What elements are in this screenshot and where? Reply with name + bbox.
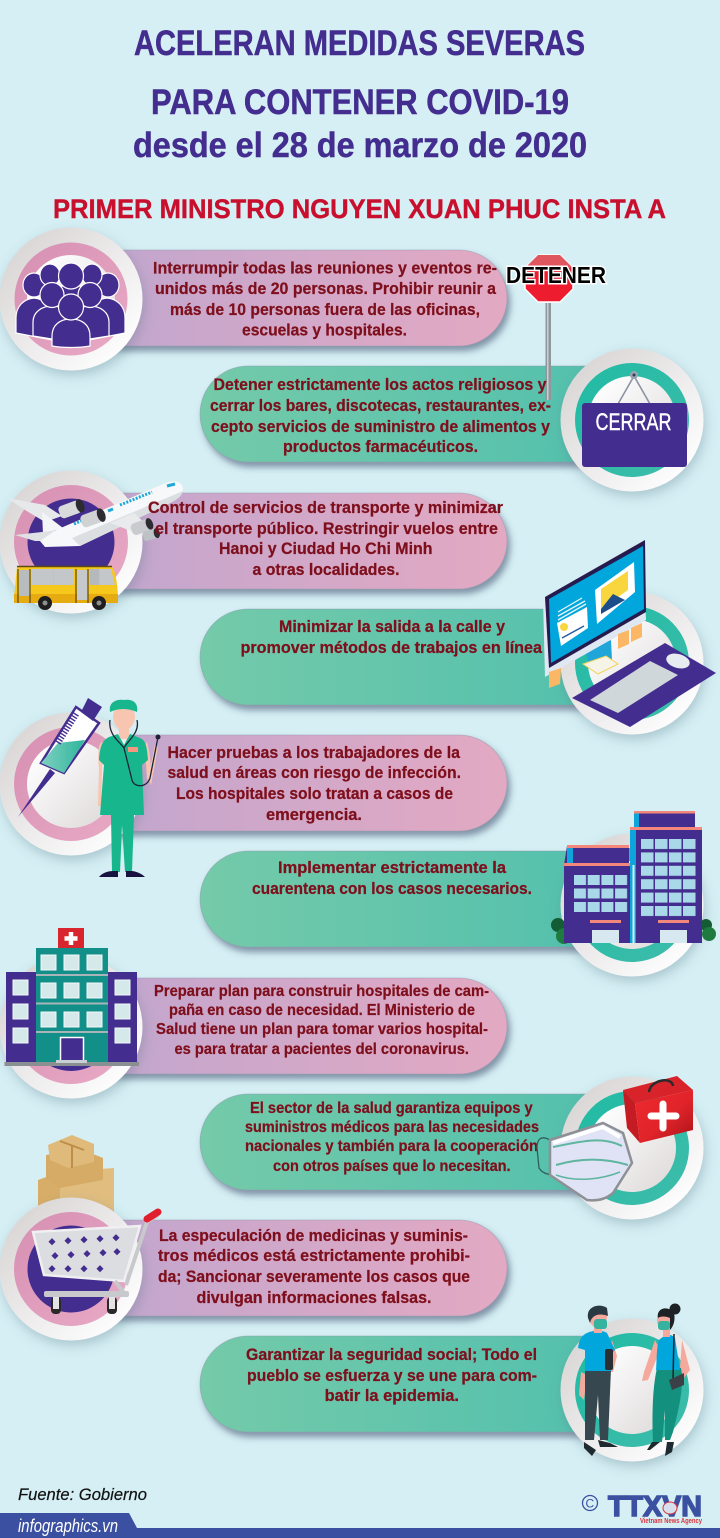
text: transport	[148, 499, 504, 579]
icon: shopping cart	[33, 1212, 158, 1314]
text: religious acts and bars: cerrar los bares, discotecas, restaurantes, ex-	[210, 397, 551, 415]
text: medical supplies: El sector de la salud garantiza equipos y	[250, 1100, 533, 1117]
text: religious acts and bars	[210, 376, 551, 456]
icon: syringe	[18, 698, 102, 817]
text: medical supplies: con otros países que lo necesitan.	[273, 1158, 511, 1175]
text: religious acts and bars: cepto servicios de suministro de alimentos y	[211, 418, 551, 436]
illustration: woman with mask	[642, 1304, 690, 1456]
panel 2: religious acts and bars	[200, 348, 704, 492]
text: transport: Control de servicios de transporte y minimizar	[148, 499, 504, 517]
illustration: man with mask	[578, 1306, 618, 1456]
icon: stop sign: DETENER	[506, 262, 606, 288]
text: health workers: Hacer pruebas a los trabajadores de la	[168, 744, 461, 762]
logo: TTXVN: Vietnam News Agency	[640, 1518, 702, 1525]
panel 1: meetings	[0, 228, 507, 370]
icon: bus	[14, 566, 118, 610]
text: religious acts and bars: Detener estrictamente los actos religiosos y	[214, 376, 547, 394]
footer band	[0, 1513, 720, 1538]
panel 10: social security	[200, 1304, 704, 1462]
title: desde el 28 de marzo de 2020	[133, 126, 587, 165]
panel 9: speculation	[0, 1135, 507, 1340]
text: meetings: más de 10 personas fuera de las oficinas,	[170, 301, 480, 319]
text: health workers	[168, 744, 461, 824]
text: meetings: escuelas y hospitales.	[242, 322, 407, 340]
panel 8: medical supplies	[200, 1076, 704, 1220]
text: field hospitals: paña en caso de necesidad. El Ministerio de	[169, 1002, 475, 1019]
text: social security: Garantizar la seguridad social; Todo el	[246, 1346, 537, 1364]
text: transport: a otras localidades.	[252, 561, 400, 579]
text: quarantine: cuarentena con los casos necesarios.	[252, 880, 532, 898]
text: medical supplies	[245, 1100, 539, 1175]
text: online work: promover métodos de trabajos en línea	[240, 639, 543, 657]
logo: TTXVN: C	[586, 1496, 594, 1510]
website: infographics.vn	[18, 1516, 118, 1536]
icon: buildings	[551, 811, 716, 944]
panel 5: health workers	[0, 698, 507, 877]
text: health workers: Los hospitales solo tratan a casos de	[176, 785, 453, 803]
text: transport: Hanoi y Ciudad Ho Chi Minh	[219, 540, 432, 558]
icon: cardboard boxes	[38, 1135, 114, 1212]
panel 4: online work	[200, 540, 716, 734]
text: meetings	[153, 260, 497, 340]
text: transport: el transporte público. Restringir vuelos entre	[155, 520, 498, 538]
text: meetings: Interrumpir todas las reuniones y eventos re-	[153, 260, 497, 278]
text: speculation: La especulación de medicinas y suminis-	[159, 1227, 468, 1245]
logo: TTXVN: TTXVN	[608, 1491, 702, 1523]
text: speculation	[158, 1227, 470, 1307]
text: quarantine: Implementar estrictamente la	[278, 859, 507, 877]
text: speculation: tros médicos está estrictamente prohibi-	[158, 1247, 470, 1265]
text: speculation: da; Sancionar severamente los casos que	[158, 1268, 470, 1286]
text: field hospitals: Preparar plan para construir hospitales de cam-	[154, 983, 489, 1000]
text: social security: pueblo se esfuerza y se une para com-	[247, 1367, 537, 1385]
text: meetings: unidos más de 20 personas. Prohibir reunir a	[155, 280, 497, 298]
icon: closed sign: CERRAR	[596, 409, 672, 436]
illustration: nurse	[98, 700, 160, 877]
text: field hospitals: es para tratar a pacientes del coronavirus.	[174, 1041, 469, 1058]
panel 3: transport	[0, 470, 507, 614]
icon: group of people	[16, 263, 125, 348]
text: online work: Minimizar la salida a la calle y	[279, 618, 506, 636]
text: health workers: salud en áreas con riesgo de infección.	[168, 764, 461, 782]
title: PARA CONTENER COVID-19	[151, 83, 569, 122]
icon: computer	[543, 540, 716, 727]
panel 6: quarantine	[200, 811, 716, 976]
icon: airplane	[7, 482, 183, 547]
text: social security	[246, 1346, 537, 1405]
title: ACELERAN MEDIDAS SEVERAS	[134, 24, 585, 63]
icon: closed sign	[582, 371, 687, 467]
text: field hospitals: Salud tiene un plan para tomar varios hospital-	[156, 1021, 488, 1038]
text: field hospitals	[154, 983, 489, 1058]
source: Fuente: Gobierno	[18, 1485, 147, 1504]
text: social security: batir la epidemia.	[325, 1387, 459, 1405]
title	[133, 24, 587, 165]
icon: face mask	[537, 1123, 632, 1200]
text: medical supplies: suministros médicos para las necesidades	[245, 1119, 539, 1136]
panel 7: field hospitals	[0, 928, 507, 1098]
subtitle: PRIMER MINISTRO NGUYEN XUAN PHUC INSTA A	[53, 194, 666, 224]
text: religious acts and bars: productos farmacéuticos.	[283, 438, 478, 456]
icon: hospital	[4, 928, 139, 1066]
text: online work	[240, 618, 543, 657]
text: medical supplies: nacionales y también para la cooperación	[245, 1138, 538, 1155]
icon: stop sign	[506, 255, 606, 400]
text: speculation: divulgan informaciones falsas.	[196, 1289, 432, 1307]
text: health workers: emergencia.	[266, 806, 362, 824]
icon: medical kit	[623, 1076, 693, 1143]
text: quarantine	[252, 859, 532, 898]
